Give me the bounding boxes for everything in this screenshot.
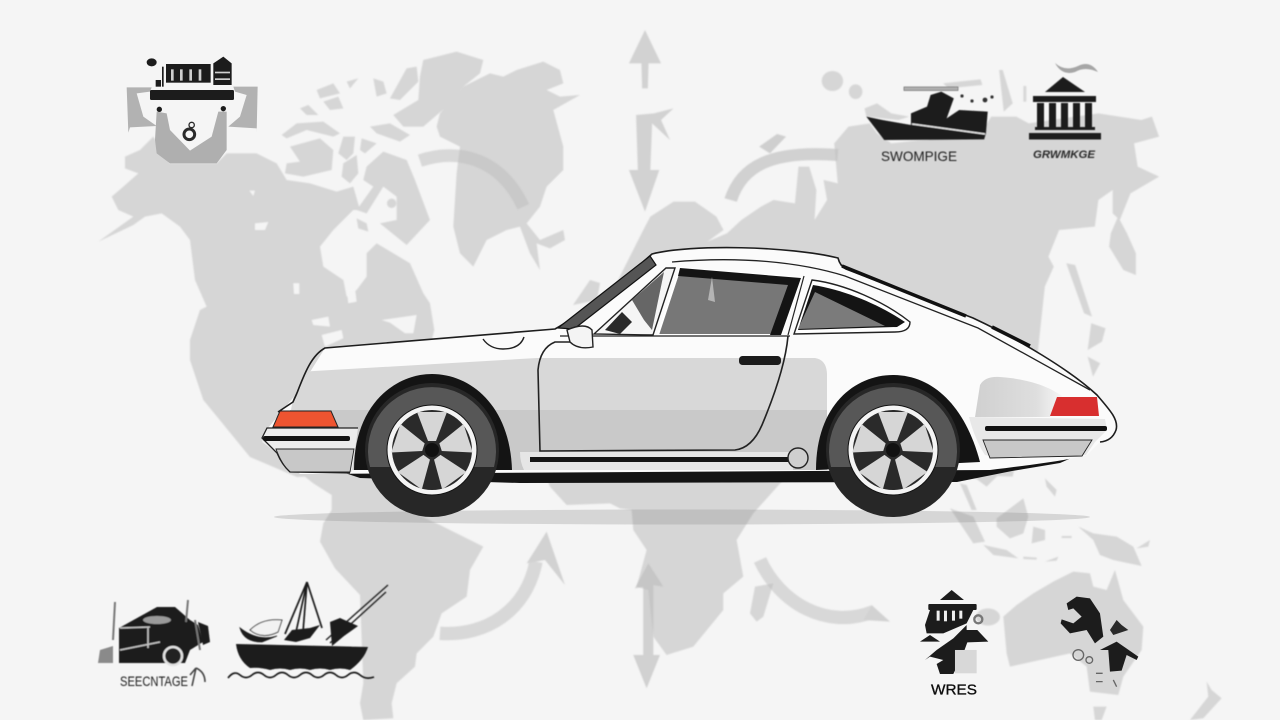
icon: engine and lock, top left — [127, 57, 258, 163]
truck body — [119, 607, 203, 663]
small canoe — [240, 628, 277, 642]
side mirror — [567, 326, 593, 348]
smoke — [1055, 63, 1098, 73]
label: temple: GRWMKGE — [1033, 149, 1096, 161]
map: arctic blobs north of russia — [822, 70, 1026, 120]
small parts — [1110, 620, 1128, 635]
rear wheel — [826, 383, 960, 517]
door pillar — [788, 276, 804, 335]
pale parts — [955, 650, 977, 673]
door handle — [739, 356, 781, 365]
base — [920, 635, 940, 642]
ship highlight — [912, 124, 985, 134]
map: small blob near australia — [976, 608, 1000, 626]
rear lamp — [1050, 397, 1099, 416]
arrow: top vertical — [629, 30, 661, 88]
truck details — [120, 627, 160, 650]
arrow: upper right curve — [731, 134, 838, 200]
map: australia — [1003, 570, 1143, 695]
engine bracket — [127, 87, 258, 133]
rear bumper strip — [985, 426, 1107, 431]
rear quarter window — [794, 280, 910, 334]
icon: temple and wrench, bottom right — [920, 590, 988, 699]
rear bumper — [969, 417, 1107, 458]
direction arrows — [420, 30, 890, 688]
map: iberia blob — [573, 280, 600, 305]
front indicator lamp — [273, 411, 338, 427]
truck wheel — [164, 647, 182, 665]
car underbody — [345, 430, 1085, 483]
icon: large wrench, bottom right — [1061, 597, 1138, 687]
gear — [974, 615, 982, 623]
map: eurasia — [616, 113, 1159, 477]
car body shell — [262, 248, 1117, 474]
ship hull — [866, 92, 988, 140]
map: southeast asia islands — [950, 473, 1150, 566]
debris — [960, 94, 994, 103]
fender notch — [483, 337, 524, 349]
door window — [658, 268, 801, 335]
car outline — [278, 248, 1117, 442]
wrench head — [1061, 597, 1103, 643]
belt line — [560, 335, 790, 337]
truck flag — [198, 622, 210, 645]
icon: sailing boat, bottom left — [228, 582, 388, 678]
sail shadow — [284, 625, 320, 642]
label: wrench temple: WRES — [931, 683, 977, 699]
roof edge dark line — [842, 266, 1030, 346]
crate — [98, 646, 113, 663]
oar — [326, 585, 388, 643]
entablature — [1033, 96, 1096, 102]
front quarter window — [594, 268, 675, 335]
front bumper — [262, 428, 358, 472]
rear wheel spokes — [852, 412, 934, 490]
map: south and central america — [297, 470, 483, 720]
rotor — [904, 87, 958, 90]
wrench — [925, 625, 988, 674]
rear bumper lower — [983, 440, 1092, 458]
map: far east strips — [1066, 217, 1136, 377]
map: north america — [98, 137, 434, 477]
icon: truck, bottom left — [98, 600, 210, 689]
map: madagascar — [750, 583, 773, 622]
base — [1035, 127, 1095, 130]
label: ship: SWOMPIGE — [881, 148, 957, 164]
map: greenland — [437, 62, 580, 270]
car body shading — [280, 358, 1062, 470]
front bumper outline — [262, 428, 358, 473]
rocker panel — [520, 448, 808, 470]
waves — [228, 672, 374, 678]
arrow: lower right curve — [760, 560, 890, 622]
arrow: lower double vertical — [633, 563, 663, 688]
dome — [940, 590, 964, 600]
map: lake holes — [249, 191, 417, 347]
windshield — [558, 256, 656, 329]
hull — [236, 644, 368, 670]
engine block — [147, 57, 234, 112]
front bumper strip — [263, 436, 350, 441]
icon: temple, top right — [1029, 63, 1101, 161]
engine fins — [171, 69, 230, 81]
icon: ship and helicopter, top right — [866, 87, 994, 164]
ornament — [190, 668, 205, 686]
pediment — [1045, 77, 1085, 92]
columns — [925, 610, 973, 633]
wheel arch front — [354, 374, 512, 470]
label: truck: SEECNTAGE — [120, 673, 188, 689]
arrow: upper double vertical — [629, 108, 674, 212]
wrench handle — [1100, 642, 1138, 672]
ground shadow — [274, 510, 1090, 524]
map: tasmania and new zealand — [1093, 682, 1222, 720]
arrow: upper left curve — [420, 156, 523, 207]
roof bar — [928, 604, 977, 610]
mast and rigging — [285, 582, 322, 634]
car — [262, 248, 1117, 517]
front wheel — [365, 383, 499, 517]
columns — [1037, 103, 1092, 127]
front wheel spokes — [391, 412, 473, 490]
map: africa — [543, 470, 783, 655]
arrow: lower left curve — [440, 532, 565, 634]
rear deck line — [672, 260, 1090, 390]
padlock — [184, 129, 195, 140]
oar blade — [330, 618, 358, 646]
front bumper lower — [276, 449, 354, 472]
wheel arch rear — [816, 375, 980, 470]
truck gear — [113, 600, 200, 650]
cargo — [250, 620, 282, 636]
lock funnel — [155, 112, 227, 163]
door outline — [538, 336, 788, 451]
map: canadian arctic islands — [282, 52, 483, 245]
